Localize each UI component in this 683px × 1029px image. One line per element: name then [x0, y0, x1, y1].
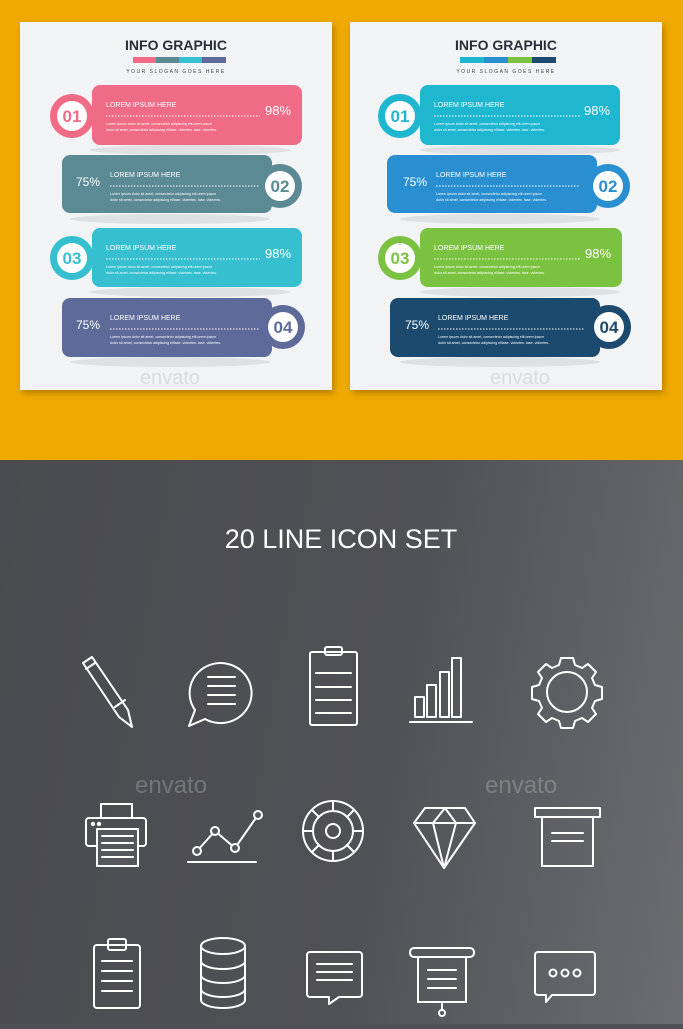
band 01: dolor sit amet, consectetur adipiscing elitase. videntes. tase. videntes. [434, 128, 545, 132]
icon: gear [532, 658, 602, 728]
band 01: Lorem ipsum dolor sit amet, consectetur adipiscing elit.orem ipsum [106, 122, 212, 126]
band 03: dolor sit amet, consectetur adipiscing elitase. videntes. tase. videntes. [434, 271, 545, 275]
band 01: 01 [63, 107, 81, 126]
band 04: 04 [600, 318, 619, 337]
watermark: envato [490, 367, 550, 389]
watermark: envato [140, 367, 200, 389]
band 03: LOREM IPSUM HERE [434, 245, 505, 252]
icon: database [201, 938, 245, 1008]
icon: speech bubble [189, 663, 252, 726]
band 02: LOREM IPSUM HERE [436, 172, 507, 179]
watermarks [135, 772, 557, 799]
band 02: Lorem ipsum dolor sit amet, consectetur adipiscing elit.orem ipsum [110, 192, 216, 196]
band 02: 02 [271, 177, 289, 196]
band 02: dolor sit amet, consectetur adipiscing elitase. videntes. tase. videntes. [436, 198, 547, 202]
icon: diamond [414, 808, 475, 868]
band 01: 98% [584, 103, 610, 118]
icon: clipboard 2 [94, 939, 140, 1008]
band 01: 01 [391, 107, 409, 126]
icon: chat [307, 952, 362, 1004]
band 03: Lorem ipsum dolor sit amet, consectetur adipiscing elit.orem ipsum [106, 265, 212, 269]
title [125, 37, 227, 75]
band 03: Lorem ipsum dolor sit amet, consectetur adipiscing elit.orem ipsum [434, 265, 540, 269]
panel: left infographic card [20, 22, 332, 390]
icon: target [303, 801, 363, 861]
band 02: dolor sit amet, consectetur adipiscing elitase. videntes. tase. videntes. [110, 198, 221, 202]
title: INFO GRAPHIC [455, 37, 557, 53]
icon: presentation board [410, 948, 474, 1016]
icon: line chart [188, 811, 262, 862]
band 01 [378, 85, 620, 155]
panel: line icon set [0, 460, 683, 1024]
band 01: LOREM IPSUM HERE [106, 102, 177, 109]
title: YOUR SLOGAN GOES HERE [126, 69, 226, 75]
band 01: LOREM IPSUM HERE [434, 102, 505, 109]
watermarks: envato [135, 772, 207, 799]
watermarks: envato [485, 772, 557, 799]
band 03: 98% [265, 246, 291, 261]
band 02: 75% [76, 175, 100, 189]
icon: clipboard [310, 647, 357, 725]
band 04: 75% [405, 318, 429, 332]
band 04 [390, 298, 631, 367]
band 02: LOREM IPSUM HERE [110, 172, 181, 179]
title: YOUR SLOGAN GOES HERE [456, 69, 556, 75]
band 04: dolor sit amet, consectetur adipiscing elitase. videntes. tase. videntes. [438, 341, 549, 345]
band 02: 75% [403, 175, 427, 189]
title: INFO GRAPHIC [125, 37, 227, 53]
band 01 [50, 85, 302, 155]
band 02 [62, 155, 302, 224]
band 01: dolor sit amet, consectetur adipiscing elitase. videntes. tase. videntes. [106, 128, 217, 132]
icon: printer [86, 804, 146, 866]
band 03: 98% [585, 246, 611, 261]
title [455, 37, 557, 75]
band 02 [387, 155, 630, 224]
band 02: 02 [599, 177, 617, 196]
band 04: LOREM IPSUM HERE [110, 315, 181, 322]
icon: bar chart [410, 658, 472, 722]
heading: 20 LINE ICON SET [225, 524, 457, 554]
band 03: LOREM IPSUM HERE [106, 245, 177, 252]
band 03: dolor sit amet, consectetur adipiscing elitase. videntes. tase. videntes. [106, 271, 217, 275]
band 01: Lorem ipsum dolor sit amet, consectetur adipiscing elit.orem ipsum [434, 122, 540, 126]
band 01: 98% [265, 103, 291, 118]
band 03 [378, 228, 622, 297]
orange background [0, 0, 683, 460]
band 03: 03 [391, 249, 409, 268]
band 04 [62, 298, 305, 367]
icon: pencil [83, 657, 132, 727]
band 04: 75% [76, 318, 100, 332]
band 03 [50, 228, 302, 297]
icon: chat dots [535, 952, 595, 1002]
icon: box [535, 808, 600, 866]
band 04: Lorem ipsum dolor sit amet, consectetur adipiscing elit.orem ipsum [438, 335, 544, 339]
band 04: Lorem ipsum dolor sit amet, consectetur adipiscing elit.orem ipsum [110, 335, 216, 339]
band 03: 03 [63, 249, 81, 268]
band 04: 04 [274, 318, 293, 337]
band 02: Lorem ipsum dolor sit amet, consectetur adipiscing elit.orem ipsum [436, 192, 542, 196]
panel: right infographic card [350, 22, 662, 390]
band 04: LOREM IPSUM HERE [438, 315, 509, 322]
band 04: dolor sit amet, consectetur adipiscing elitase. videntes. tase. videntes. [110, 341, 221, 345]
